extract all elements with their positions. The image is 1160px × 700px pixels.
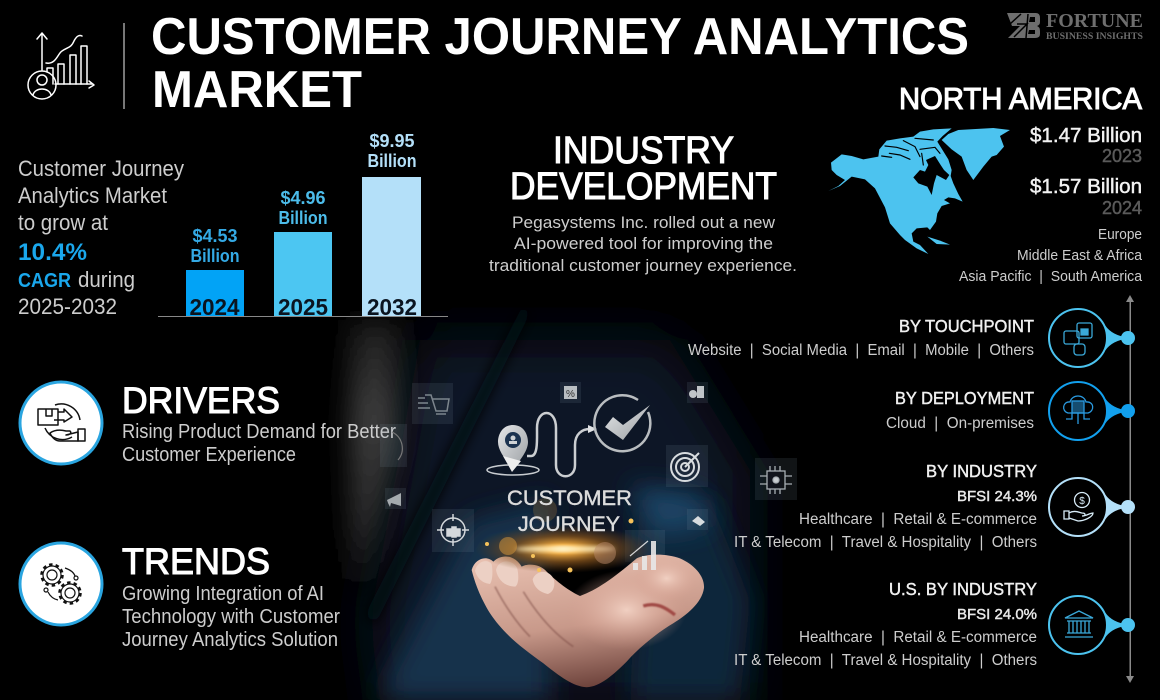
deployment node (1049, 382, 1135, 440)
bar 2024: $4.53 (192, 226, 238, 246)
segment: U.S. by industry (734, 579, 1135, 669)
glow above palm (475, 498, 651, 573)
deployment text: Cloud | On-premises (886, 415, 1034, 432)
header icon: analytics and customer (28, 33, 94, 99)
title: CUSTOMER JOURNEY ANALYTICS (151, 8, 969, 66)
floating icon tiles (380, 382, 797, 562)
segment: by industry (734, 461, 1135, 551)
drivers heading: DRIVERS (122, 380, 280, 421)
industry development heading: DEVELOPMENT (510, 166, 777, 208)
north america figures: 2024 (1102, 198, 1142, 218)
north america figures: 2023 (1102, 146, 1142, 166)
path arrow (527, 413, 590, 476)
trends heading: TRENDS (122, 541, 270, 582)
chart icon on thumb (630, 541, 656, 570)
other regions (959, 227, 1143, 285)
other regions: Middle East & Africa (1017, 248, 1143, 264)
U.S. industry text: IT & Telecom | Travel & Hospitality | Others (734, 652, 1037, 669)
U.S. industry node (1049, 596, 1135, 654)
segment: by deployment (886, 382, 1135, 440)
north america figures: $1.47 Billion (1030, 125, 1142, 147)
bar 2025: Billion (278, 208, 328, 228)
bar 2025: 2025 (278, 294, 328, 320)
touchpoint text (688, 316, 1034, 359)
CAGR text block: Analytics Market (18, 183, 167, 208)
industry development text: AI-powered tool for improving the (514, 234, 773, 253)
touchpoint text: BY TOUCHPOINT (899, 316, 1034, 336)
icon: percent tile: % (566, 389, 575, 400)
bar 2025: $4.96 (280, 188, 326, 208)
drivers panel (20, 380, 396, 466)
CAGR text block: during (78, 267, 135, 292)
trends panel (20, 541, 340, 651)
bar 2032: $9.95 (370, 131, 414, 151)
industry text (734, 461, 1037, 551)
logo: Fortune Business Insights (1007, 10, 1143, 42)
customer journey graphic (487, 395, 650, 536)
industry node: $ (1079, 496, 1085, 507)
title (151, 8, 969, 119)
drivers icon (20, 382, 102, 464)
trends text: Journey Analytics Solution (122, 629, 338, 651)
CAGR text block: 2025-2032 (18, 294, 117, 319)
icon: shopping cart (418, 395, 449, 414)
industry development heading: INDUSTRY (553, 130, 734, 172)
title: MARKET (152, 61, 362, 119)
logo: Fortune Business Insights: FORTUNE (1046, 10, 1143, 32)
bar 2024: Billion (190, 246, 240, 266)
CAGR text block: 10.4% (18, 239, 87, 266)
icon: chip (760, 466, 792, 494)
deployment text: BY DEPLOYMENT (895, 388, 1034, 408)
industry text: IT & Telecom | Travel & Hospitality | Others (734, 534, 1037, 551)
icon: percent tile (564, 386, 577, 400)
bar 2025 (274, 188, 332, 320)
CAGR text block: CAGR (18, 270, 71, 292)
bar 2024: 2024 (190, 294, 240, 320)
industry development text: Pegasystems Inc. rolled out a new (512, 213, 776, 232)
drivers text (122, 421, 396, 466)
logo: Fortune Business Insights: BUSINESS INSIGHTS (1046, 32, 1143, 42)
north america heading: NORTH AMERICA (899, 81, 1142, 116)
other regions: Europe (1098, 227, 1142, 243)
U.S. industry text: U.S. BY INDUSTRY (889, 579, 1037, 599)
north america figures (1030, 125, 1142, 218)
icon: dartboard (671, 453, 699, 481)
icon: handshake (692, 516, 705, 526)
trends icon (20, 543, 102, 625)
bar 2032 (362, 131, 421, 320)
hand (472, 555, 704, 687)
icon: coins tile (689, 386, 704, 398)
industry text: BFSI 24.3% (957, 488, 1037, 505)
header divider (123, 23, 125, 109)
north america figures: $1.57 Billion (1030, 176, 1142, 198)
industry development heading (510, 130, 777, 208)
industry development text: traditional customer journey experience. (489, 256, 797, 275)
customer journey label: JOURNEY (518, 513, 620, 536)
icon: location pin (487, 425, 539, 475)
U.S. industry text (734, 579, 1037, 669)
industry development (489, 130, 797, 275)
bar 2032: 2032 (367, 294, 417, 320)
touchpoint text: Website | Social Media | Email | Mobile | Others (688, 342, 1034, 359)
bar 2032: Billion (368, 151, 416, 171)
background: suit photo (336, 310, 770, 700)
CAGR text block: Customer Journey (18, 156, 184, 181)
U.S. industry text: BFSI 24.0% (957, 606, 1037, 623)
arrow head (588, 425, 597, 433)
icon: circle arrows (392, 432, 402, 460)
U.S. industry text: Healthcare | Retail & E-commerce (799, 629, 1037, 646)
drivers text: Customer Experience (122, 444, 296, 466)
bar 2024 (186, 226, 244, 320)
icon: check circle (594, 395, 650, 451)
industry node (1049, 478, 1135, 536)
trends text (122, 583, 340, 651)
other regions: Asia Pacific | South America (959, 269, 1143, 285)
touchpoint node (1049, 309, 1135, 367)
icon: megaphone (387, 493, 401, 507)
segment: by touchpoint (688, 309, 1135, 367)
bar chart: market size (158, 131, 448, 320)
map: North America (828, 128, 1010, 254)
drivers text: Rising Product Demand for Better (122, 421, 396, 443)
industry text: BY INDUSTRY (926, 461, 1037, 481)
finger tips (475, 561, 554, 594)
deployment text (886, 388, 1034, 432)
CAGR text block: to grow at (18, 210, 108, 235)
industry text: Healthcare | Retail & E-commerce (799, 511, 1037, 528)
trends text: Growing Integration of AI (122, 583, 324, 605)
industry development text (489, 213, 797, 275)
shadow behind palm (530, 558, 650, 602)
timeline axis (1126, 295, 1134, 683)
customer journey label: CUSTOMER (507, 487, 632, 510)
customer journey label (507, 487, 632, 536)
CAGR text block (18, 156, 184, 319)
trends text: Technology with Customer (122, 606, 340, 628)
icon: audience target (437, 514, 469, 546)
